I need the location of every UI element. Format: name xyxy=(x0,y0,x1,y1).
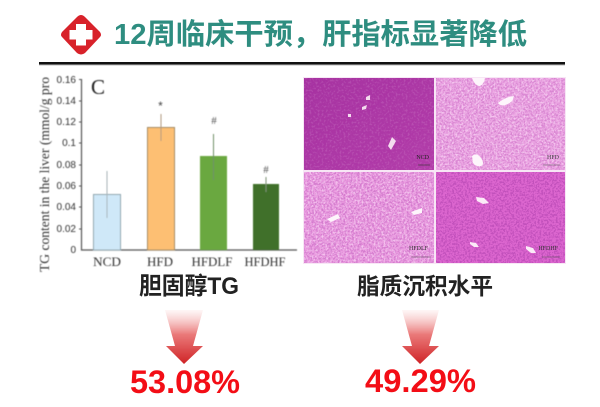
y axis tick labels: 0.16 xyxy=(57,75,76,86)
image: HFD: HFD xyxy=(547,155,560,161)
bar chart: TG content in the liver xyxy=(37,75,297,272)
title: 12周临床干预，肝指标显著降低 xyxy=(114,18,527,51)
image: HFD xyxy=(436,78,565,170)
y axis tick labels: 0.08 xyxy=(57,160,76,171)
y axis tick labels: 0.14 xyxy=(57,96,76,107)
y axis tick labels: 0.04 xyxy=(57,202,76,213)
x axis labels: HFDLF xyxy=(192,254,232,269)
chart letter C: C xyxy=(91,75,105,99)
bar: HFDLF: # xyxy=(211,115,217,127)
value: 53.08%: 53.08% xyxy=(130,364,240,400)
bar: NCD xyxy=(94,171,120,250)
y axis tick labels: 0.06 xyxy=(57,181,76,192)
icon: red medical cross xyxy=(61,15,101,54)
panel: liver histology images xyxy=(303,77,566,264)
image: HFDLF xyxy=(304,172,434,263)
image: NCD xyxy=(304,78,434,170)
x axis labels: HFD xyxy=(147,254,173,269)
image: HFDHF xyxy=(436,172,565,263)
y axis tick labels: 0.02 xyxy=(57,224,76,235)
bar: HFDHF xyxy=(253,164,279,250)
image: HFDLF: HFDLF xyxy=(409,246,429,252)
y axis tick labels: 0.1 xyxy=(62,138,76,149)
value: 49.29%: 49.29% xyxy=(365,363,476,399)
label: 胆固醇TG: 胆固醇TG xyxy=(139,273,239,300)
arrow: TG decrease xyxy=(165,310,203,364)
x axis labels xyxy=(93,254,286,269)
bar: HFD: * xyxy=(158,99,163,113)
bar: HFD xyxy=(148,99,174,250)
bar: HFDLF xyxy=(200,115,227,250)
y axis tick labels xyxy=(57,75,76,256)
y axis tick labels: 0.12 xyxy=(57,117,76,128)
bar: HFDHF: # xyxy=(263,164,269,176)
axes xyxy=(82,79,297,250)
x axis labels: HFDHF xyxy=(244,254,286,269)
title underline xyxy=(39,62,565,64)
y axis tick labels: 0 xyxy=(70,245,76,256)
image: NCD: NCD xyxy=(416,155,430,161)
arrow: lipid deposition decrease xyxy=(402,310,439,364)
x axis labels: NCD xyxy=(93,254,121,269)
label: 脂质沉积水平: 脂质沉积水平 xyxy=(357,273,493,299)
image: HFDHF: HFDHF xyxy=(538,246,559,252)
y axis title: TG content in the liver (mmol/g pro xyxy=(37,77,52,272)
